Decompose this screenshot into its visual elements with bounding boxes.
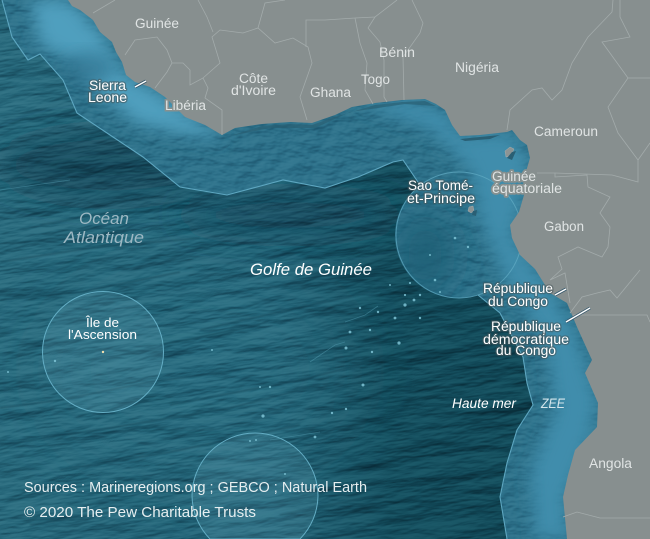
- label: Guinée équatoriale: Guinée: [492, 169, 536, 184]
- label: Nigéria: Nigéria: [455, 60, 499, 75]
- label: Ghana: Ghana: [310, 85, 351, 100]
- label: Bénin: Bénin: [379, 45, 415, 60]
- marine protection circle: Ascension: [42, 292, 164, 412]
- EEZ circle: Saint Helena waters: [192, 433, 318, 539]
- label: Sierra Leone: Sierra: [89, 78, 127, 93]
- leader: Republique du Congo: [555, 289, 566, 295]
- sources line: Sources : Marineregions.org ; GEBCO ; Natural Earth: [24, 480, 367, 496]
- label: Guinée équatoriale: équatoriale: [492, 181, 562, 196]
- label: République démocratique du Congo: démocratique: [483, 332, 569, 347]
- label: République du Congo: du Congo: [488, 294, 548, 309]
- label: Sao Tomé-et-Principe: Sao Tomé-: [408, 178, 473, 193]
- label: Océan Atlantique: Océan: [79, 209, 129, 228]
- island: Sao Tome: [468, 206, 474, 213]
- leader: Republique democratique du Congo: [566, 308, 590, 322]
- label: Cameroun: Cameroun: [534, 124, 598, 139]
- label: Togo: Togo: [361, 72, 390, 87]
- label: République du Congo: République: [483, 281, 553, 296]
- label: République démocratique du Congo: République: [491, 319, 561, 334]
- label: République démocratique du Congo: du Congo: [496, 343, 556, 358]
- label: Île de l'Ascension: l'Ascension: [68, 327, 137, 342]
- label: Guinée: Guinée: [135, 16, 179, 31]
- label: ZEE: ZEE: [540, 396, 566, 411]
- seamount dots: [7, 237, 469, 475]
- EEZ circle: Sao Tome waters: [396, 172, 522, 298]
- light fracture-zone edges: [0, 241, 380, 473]
- mid-ocean ridge streaks: [0, 180, 378, 440]
- label: Haute mer: Haute mer: [452, 396, 517, 411]
- label: Libéria: Libéria: [165, 98, 206, 113]
- label: Sierra Leone: Leone: [88, 90, 127, 105]
- title label: Golfe de Guinée: Golfe de Guinée: [250, 260, 372, 279]
- island: Bioko: [505, 147, 514, 157]
- coastal shadows: [230, 101, 516, 216]
- label: Sao Tomé-et-Principe: et-Principe: [407, 191, 475, 206]
- label: Gabon: Gabon: [544, 219, 584, 234]
- label: Côte d'Ivoire: Côte: [239, 71, 268, 86]
- label: Côte d'Ivoire: d'Ivoire: [231, 83, 276, 98]
- label: Angola: Angola: [589, 456, 632, 471]
- fracture-zone ridges: [0, 195, 380, 525]
- leader: Sierra Leone: [135, 81, 146, 87]
- label: Océan Atlantique: Atlantique: [63, 228, 144, 247]
- copyright line: © 2020 The Pew Charitable Trusts: [24, 505, 256, 521]
- label: Île de l'Ascension: Île de: [85, 315, 119, 330]
